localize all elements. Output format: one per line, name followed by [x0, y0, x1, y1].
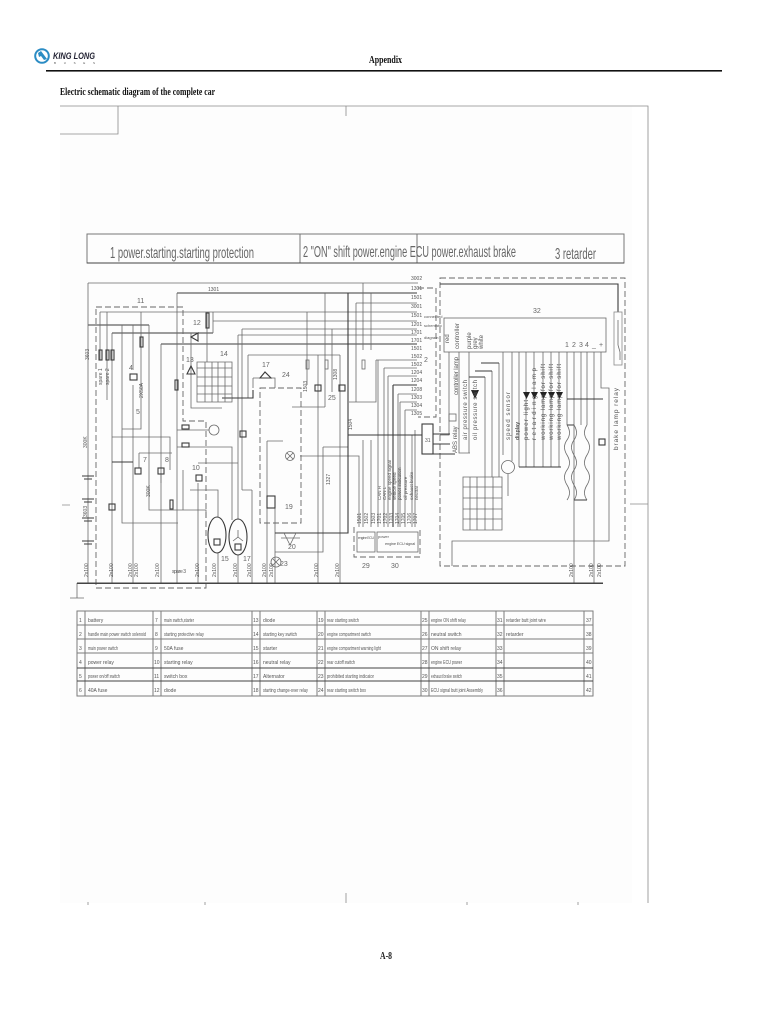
footer: page number: A-8	[380, 951, 392, 962]
bus wire tags: 2x100	[155, 563, 161, 577]
panel: retarder controller: controller lamp	[454, 356, 460, 395]
legend column 6: 34	[497, 660, 503, 666]
legend column 1: 2	[79, 632, 82, 638]
panel: retarder controller: 4	[585, 342, 589, 349]
bus wire tags: 2x100	[314, 563, 320, 577]
section labels in schematic: 1501	[411, 295, 422, 301]
bus wire tags: 2x100	[597, 563, 603, 577]
legend column 3: Alternator	[263, 674, 285, 680]
vertical wires left section	[88, 283, 253, 583]
section labels in schematic: 300K	[146, 485, 152, 497]
legend column 2: diode	[164, 688, 176, 694]
text: section 1: 1 power.starting.starting protection	[110, 245, 254, 262]
legend column 3: 17	[253, 674, 259, 680]
legend column 7: 37	[586, 618, 592, 624]
ECU wire function tags: vehicle speed	[392, 472, 397, 500]
legend column 3	[253, 618, 308, 694]
legend column 2: switch box	[164, 674, 188, 680]
ECU wire function tags: 1502	[364, 513, 370, 524]
legend column 4: rear cutoff switch	[327, 660, 355, 666]
legend column 5: 29	[422, 674, 428, 680]
legend column 4: 19	[318, 618, 324, 624]
legend column 1: battery	[88, 618, 104, 624]
section labels in schematic: 2X50A	[139, 382, 145, 398]
legend column 4: 20	[318, 632, 324, 638]
section labels in schematic: 1308	[333, 369, 339, 380]
legend column 2: 11	[154, 674, 159, 680]
legend column 5: 30	[422, 688, 428, 694]
bus wire tags: 2x100	[247, 563, 253, 577]
section labels in schematic: 8	[165, 457, 169, 464]
panel: retarder controller: white	[479, 334, 485, 350]
legend column 4: engine compartment switch	[327, 632, 371, 638]
section labels in schematic: 1701	[411, 330, 422, 336]
panel: retarder controller: retarding lamp	[532, 367, 538, 440]
ECU wire function tags: 1703	[389, 513, 395, 524]
ECU wire function tags: power indication	[397, 467, 402, 500]
legend column 6: 32	[497, 632, 503, 638]
ECU wire function tags	[357, 460, 419, 524]
panel: retarder controller: grey	[473, 337, 479, 349]
legend column 3: diode	[263, 618, 275, 624]
legend column 1: power relay	[88, 660, 114, 666]
section labels in schematic: 1501	[411, 313, 422, 319]
bus wire tags: 2x100	[335, 563, 341, 577]
legend column 5: 28	[422, 660, 428, 666]
legend column 4: 24	[318, 688, 324, 694]
bus wire tags: 2x100	[195, 563, 201, 577]
heading: Appendix: Appendix	[369, 54, 402, 66]
legend column 5: engine ECU power	[431, 660, 462, 666]
section labels in schematic: 2	[424, 357, 428, 364]
chart: electrical schematic	[70, 276, 625, 598]
header rule	[46, 70, 722, 72]
section labels in schematic: 17	[243, 556, 251, 563]
section labels in schematic	[83, 276, 541, 575]
legend column 7: 38	[586, 632, 592, 638]
section labels in schematic: 23	[280, 561, 288, 568]
legend column 3: 14	[253, 632, 259, 638]
section labels in schematic: 24	[282, 372, 290, 379]
legend column 4: prohibited starting indicator	[327, 674, 374, 680]
section labels in schematic: 10	[192, 465, 200, 472]
vertical wires middle section	[248, 283, 422, 583]
panel: drawing sheet frame	[60, 106, 648, 905]
bus wire tags: 2x100	[269, 563, 275, 577]
legend column 4: engine compartment warning light	[327, 646, 381, 652]
table: retarder switch matrix	[463, 477, 502, 530]
legend column 1: 6	[79, 688, 82, 694]
section labels in schematic: spare 2	[105, 368, 111, 385]
section labels in schematic: 3603	[85, 349, 91, 360]
legend column 2: main switch,starter	[164, 618, 194, 624]
panel: retarder controller: brake lamp relay	[613, 387, 620, 450]
main horizontal wires	[70, 283, 418, 598]
ECU wire function tags: 1702	[383, 513, 389, 524]
legend column 2: 12	[154, 688, 160, 694]
legend column 4: 22	[318, 660, 324, 666]
text: section 2: 2 "ON" shift power.engine ECU power.exhaust brake	[303, 244, 516, 261]
section labels in schematic: 7	[143, 457, 147, 464]
panel: retarder controller: controller	[455, 323, 461, 349]
section labels in schematic: 1204	[411, 378, 422, 384]
bus wire tags: 2x100	[128, 563, 134, 577]
ground bus line	[77, 582, 603, 584]
legend column 4: 21	[318, 646, 324, 652]
legend column 3: neutral relay	[263, 660, 291, 666]
ECU wire function tags: oil pressure	[403, 476, 408, 500]
section labels in schematic: 1305	[411, 411, 422, 417]
section labels in schematic: 1208	[411, 387, 422, 393]
section labels in schematic: spare 1	[98, 368, 104, 385]
section labels in schematic: 20	[288, 544, 296, 551]
ECU wire function tags: engine speed signal	[387, 460, 392, 500]
legend column 5: 27	[422, 646, 428, 652]
panel: section title bar	[87, 234, 624, 263]
panel: retarder controller: purple	[467, 332, 473, 349]
ECU wire function tags: 1706	[407, 513, 413, 524]
section labels in schematic: 1701	[411, 338, 422, 344]
legend column 4	[318, 618, 381, 694]
section labels in schematic: 19	[285, 504, 293, 511]
section labels in schematic: 1204	[411, 370, 422, 376]
panel: retarder controller: air pressure switch	[463, 380, 469, 440]
icon: King Long logo: KING LONG	[53, 51, 95, 62]
legend column 6: retarder	[506, 632, 524, 638]
ECU wire function tags: 1705	[401, 513, 407, 524]
section labels in schematic: 1503	[303, 381, 309, 392]
panel: retarder controller: _	[591, 342, 596, 349]
legend column 1: 40A fuse	[88, 688, 108, 694]
legend column 2: starting relay	[164, 660, 193, 666]
bus wire tags: 2x100	[262, 563, 268, 577]
section labels in schematic: 30	[391, 563, 399, 570]
legend column 1	[79, 618, 146, 694]
panel: retarder controller: working lamp for shift	[557, 364, 563, 441]
panel: retarder controller: oil pressure switch	[473, 380, 479, 440]
text: section 3: 3 retarder	[555, 246, 596, 263]
legend column 6: 33	[497, 646, 503, 652]
panel: retarder controller: power light	[524, 400, 530, 440]
legend column 1: 5	[79, 674, 82, 680]
section labels in schematic: 13	[186, 357, 194, 364]
legend column 7: 39	[586, 646, 592, 652]
section labels in schematic: 29	[362, 563, 370, 570]
ECU wire function tags: 1501	[357, 513, 363, 524]
legend column 3: starting change-over relay	[263, 688, 308, 694]
legend column 6: retarder butt joint wire	[506, 618, 546, 624]
panel: retarder controller: 2	[572, 342, 576, 349]
panel: engine ECU connectors: power	[378, 534, 390, 539]
icon: relays and fuses	[99, 313, 365, 545]
legend column 5	[422, 618, 483, 694]
section labels in schematic: 1327	[326, 474, 332, 485]
section labels in schematic: 1502	[411, 354, 422, 360]
legend column 4: rear starting switch	[327, 618, 359, 624]
legend column 3: starting key switch	[263, 632, 297, 638]
legend column 1: 3	[79, 646, 82, 652]
section labels in schematic: 1504	[348, 419, 354, 430]
panel: retarder controller: working lamp for shift	[541, 364, 547, 441]
legend column 2: 8	[155, 632, 158, 638]
legend column 3: 18	[253, 688, 259, 694]
section labels in schematic: 4	[129, 365, 133, 372]
legend column 3: 15	[253, 646, 259, 652]
section labels in schematic: 12	[193, 320, 201, 327]
panel: engine ECU connectors: engine ECU signal	[385, 541, 415, 546]
panel: retarder controller: 1	[565, 342, 569, 349]
legend column 7: 41	[586, 674, 592, 680]
panel: retarder controller: ABS relay	[453, 426, 459, 453]
legend column 4: rear starting switch box	[327, 688, 366, 694]
legend column 7: 42	[586, 688, 592, 694]
panel: engine ECU connectors: engine ECU	[358, 536, 374, 540]
bus wire tags	[84, 563, 603, 577]
legend column 6	[497, 618, 546, 694]
legend column 3: starter	[263, 646, 278, 652]
panel: retarder controller: red	[445, 334, 451, 343]
box: signal connector 31: 31	[425, 438, 431, 444]
legend column 6: 36	[497, 688, 503, 694]
box: signal connector 31	[422, 424, 433, 454]
panel: retarder controller: +	[599, 342, 603, 349]
bus wire tags: 2x100	[589, 563, 595, 577]
section labels in schematic: 1502	[411, 362, 422, 368]
legend column 1: 4	[79, 660, 82, 666]
icon: King Long logo: B U S E S	[54, 61, 95, 65]
bus wire tags: 2x100	[109, 563, 115, 577]
ECU wire function tags: 1707	[413, 513, 419, 524]
legend column 2: 50A fuse	[164, 646, 184, 652]
section labels in schematic: 1301	[411, 286, 422, 292]
legend column 5: 26	[422, 632, 428, 638]
bus wire tags: 2x100	[233, 563, 239, 577]
section labels in schematic: diagram	[424, 335, 439, 340]
section labels in schematic: 1303	[411, 395, 422, 401]
bus wire tags: 2x100	[212, 563, 218, 577]
section labels in schematic: connected	[424, 314, 442, 319]
legend column 2	[154, 618, 204, 694]
ECU wire function tags: CAN L	[382, 486, 387, 500]
panel: retarder controller: display	[515, 422, 521, 440]
panel: retarder controller: speed sensor	[506, 392, 512, 440]
icon: battery cells	[82, 476, 94, 544]
legend column 7: 40	[586, 660, 592, 666]
ECU wire function tags: 1704	[395, 513, 401, 524]
legend column 6: 31	[497, 618, 503, 624]
section labels in schematic: 1201	[411, 322, 422, 328]
section labels in schematic: 14	[220, 351, 228, 358]
legend column 1: main power switch	[88, 646, 118, 652]
icon: alternator	[229, 519, 247, 555]
legend column 2: 9	[155, 646, 158, 652]
ECU wire function tags: 1503	[371, 513, 377, 524]
section labels in schematic: 1501	[411, 346, 422, 352]
table: starting key switch matrix	[197, 362, 253, 402]
section labels in schematic: 1301	[208, 287, 219, 293]
heading: diagram title: Electric schematic diagram of the complete car	[60, 86, 215, 98]
legend column 5: 25	[422, 618, 428, 624]
ECU wire function tags: 1701	[377, 513, 383, 524]
legend column 5: ON shift relay	[431, 646, 462, 652]
legend column 5: ECU signal butt joint Assembly	[431, 688, 483, 694]
legend column 1: power on/off switch	[88, 674, 120, 680]
section labels in schematic: 5	[136, 409, 140, 416]
legend column 2: starting protective relay	[164, 632, 204, 638]
legend column 2: 10	[154, 660, 160, 666]
section labels in schematic: schematic	[424, 323, 442, 328]
legend column 5: neutral switch	[431, 632, 462, 638]
dashed boxes	[96, 278, 625, 588]
ECU wire function tags: neutral	[414, 486, 419, 500]
table: component legend	[77, 611, 593, 696]
section labels in schematic: 1304	[411, 403, 422, 409]
section labels in schematic: spare 3	[172, 569, 186, 575]
section labels in schematic: 11	[137, 298, 144, 305]
legend column 7	[586, 618, 592, 694]
legend column 3: 13	[253, 618, 259, 624]
panel: engine ECU connectors	[357, 532, 418, 552]
section labels in schematic: 25	[328, 395, 336, 402]
bus wire tags: 2x100	[134, 563, 140, 577]
section labels in schematic: 3002	[411, 276, 422, 282]
icon: starter motor	[208, 517, 226, 553]
panel: retarder controller	[433, 284, 622, 583]
section labels in schematic: 3001	[411, 304, 422, 310]
legend column 5: engine ON shift relay	[431, 618, 466, 624]
legend column 1: 1	[79, 618, 82, 624]
legend column 5: exhaust brake switch	[431, 674, 462, 680]
legend column 2: 7	[155, 618, 158, 624]
panel: retarder controller: working lamp for shift	[549, 364, 555, 441]
panel: retarder controller: 3	[579, 342, 583, 349]
section labels in schematic: 32	[533, 308, 541, 315]
section labels in schematic: 300K	[83, 436, 89, 448]
legend column 4: 23	[318, 674, 324, 680]
icon: King Long logo	[35, 49, 95, 65]
legend column 3: 16	[253, 660, 259, 666]
ECU wire function tags: exhaust brake	[409, 471, 414, 500]
legend column 6: 35	[497, 674, 503, 680]
bus wire tags: 2x100	[569, 563, 575, 577]
section labels in schematic: 3603	[83, 506, 89, 517]
bus wire tags: 2x100	[84, 563, 90, 577]
legend column 1: handle main power switch solenoid	[88, 632, 146, 638]
section labels in schematic: 17	[262, 362, 270, 369]
section labels in schematic: 15	[221, 556, 229, 563]
icon: lamps and meter circles	[209, 425, 294, 567]
ECU wire function tags: CAN H	[377, 486, 382, 500]
